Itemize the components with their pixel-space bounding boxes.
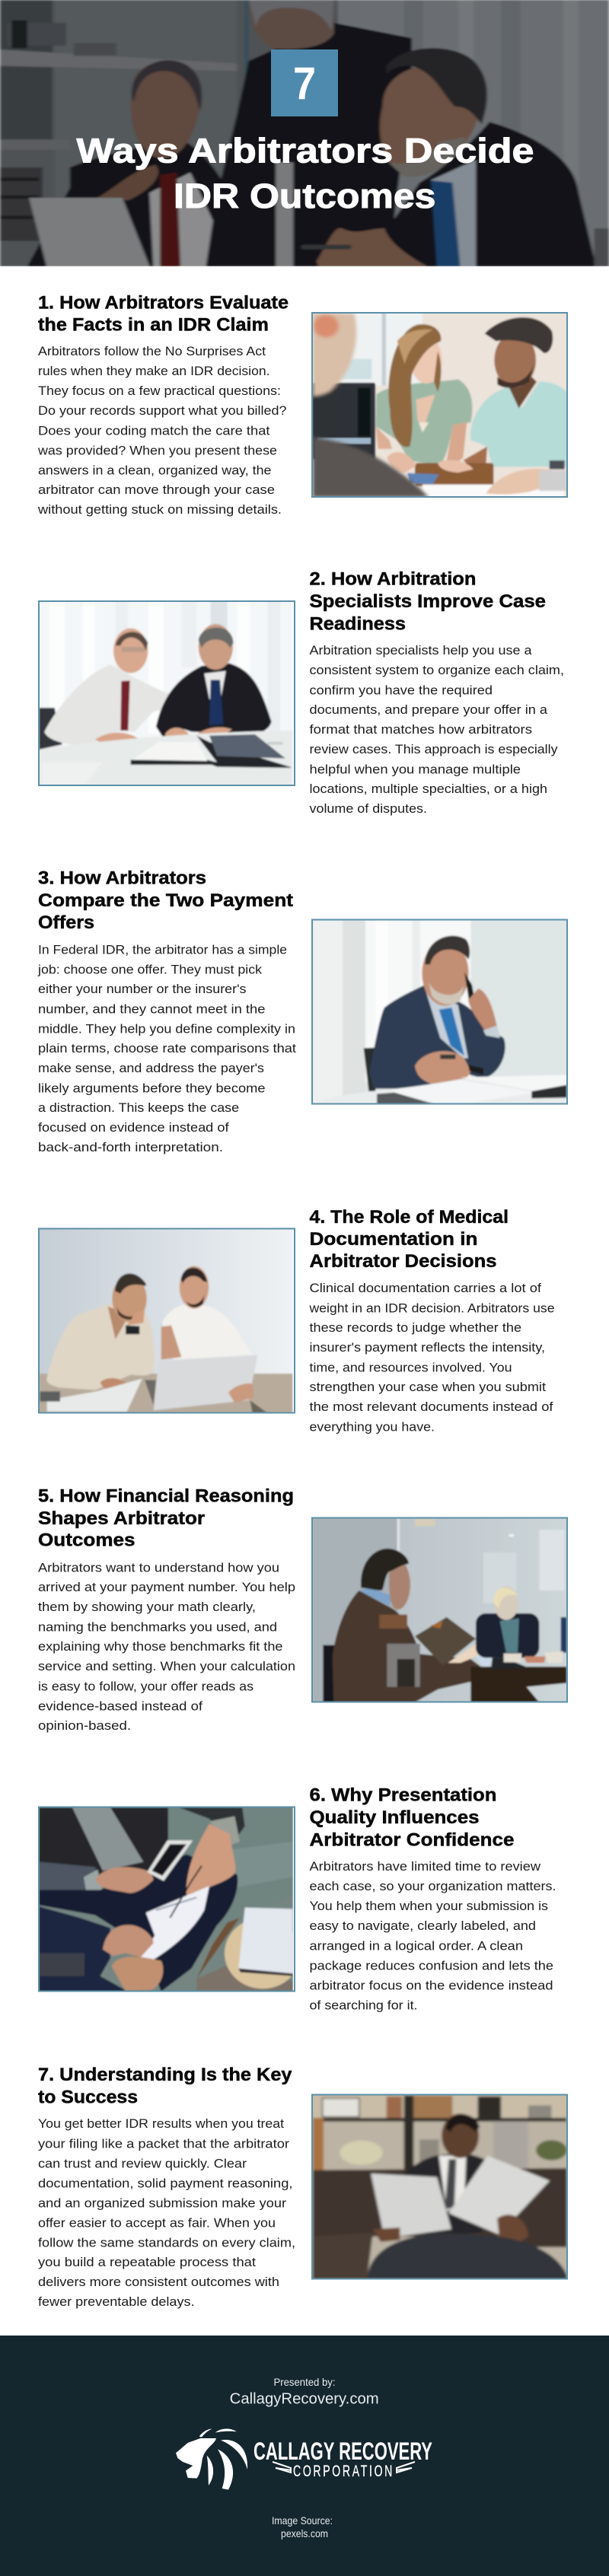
body text 7: delivers more consistent outcomes with (38, 2275, 279, 2289)
heading 6: Arbitrator Confidence (309, 1829, 515, 1851)
body text 6: each case, so your organization matters. (309, 1880, 556, 1893)
image frame 7 (312, 2094, 567, 2278)
body text 1: rules when they make an IDR decision. (38, 365, 269, 378)
heading 2 (309, 569, 546, 635)
image: man reading papers on a sofa (311, 2093, 571, 2283)
body text 7: you build a repeatable process that (38, 2256, 256, 2269)
body text 5: Arbitrators want to understand how you (38, 1562, 279, 1575)
body text 5: evidence-based instead of (38, 1700, 203, 1714)
panel: section 2 (34, 569, 564, 816)
body text 7: You get better IDR results when you treat (38, 2117, 284, 2131)
heading 3: Compare the Two Payment (38, 890, 293, 911)
body text 1: Do your records support what you billed? (38, 404, 286, 418)
body text 5: naming the benchmarks you used, and (38, 1621, 277, 1635)
body text 7: and an organized submission make your (38, 2196, 287, 2210)
panel: section 5 (38, 1485, 571, 1733)
heading 5: Shapes Arbitrator (38, 1508, 205, 1529)
title: IDR Outcomes (174, 177, 435, 215)
body text 1: was provided? When you present these (37, 444, 277, 458)
body text 6: arbitrator focus on the evidence instead (309, 1979, 553, 1992)
body text 5: them by showing your math clearly, (38, 1600, 256, 1614)
body text 2: helpful when you manage multiple (309, 763, 521, 776)
number badge (271, 49, 338, 116)
body text 6 (309, 1860, 556, 2012)
icon: right wing swoosh (397, 2462, 415, 2473)
body text 2: documents, and prepare your offer in a (309, 703, 548, 717)
heading 1: 1. How Arbitrators Evaluate (38, 292, 289, 314)
heading 7: to Success (38, 2087, 138, 2108)
body text 5: opinion-based. (38, 1719, 131, 1733)
presented by text: Presented by: (274, 2376, 335, 2388)
body text 6: arranged in a logical order. A clean (309, 1939, 523, 1953)
logo: Callagy Recovery Corporation: CORPORATION (293, 2463, 394, 2480)
panel: footer (0, 2336, 609, 2576)
heading 3: 3. How Arbitrators (38, 868, 206, 889)
image source credit: Image Source: (272, 2514, 333, 2527)
icon: lion head (176, 2428, 247, 2490)
body text 2: confirm you have the required (309, 683, 493, 697)
body text 3: a distraction. This keeps the case (38, 1101, 239, 1115)
body text 7: documentation, solid payment reasoning, (38, 2176, 292, 2190)
heading 5: 5. How Financial Reasoning (38, 1485, 294, 1507)
body text 4: insurer's payment reflects the intensity, (309, 1341, 545, 1355)
image source credit: pexels.com (281, 2527, 328, 2539)
body text 4: Clinical documentation carries a lot of (309, 1282, 541, 1295)
right man (390, 122, 596, 266)
body text 7: follow the same standards on every claim, (38, 2236, 295, 2250)
body text 3: make sense, and address the payer's (38, 1062, 264, 1075)
image source credit (272, 2514, 333, 2539)
body text 4: time, and resources involved. You (309, 1361, 512, 1374)
image frame 2 (39, 601, 295, 785)
body text 4 (308, 1282, 554, 1434)
body text 3: number, and they cannot meet in the (38, 1003, 265, 1017)
body text 3: job: choose one offer. They must pick (37, 963, 263, 977)
body text 7: fewer preventable delays. (38, 2295, 195, 2309)
panel: section 3 (37, 868, 571, 1154)
heading 6: Quality Influences (309, 1807, 480, 1828)
body text 7: can trust and review quickly. Clear (38, 2157, 247, 2170)
body text 7: offer easier to accept as fair. When you (38, 2216, 276, 2230)
number badge: 7 (293, 58, 316, 109)
heading 3: Offers (38, 912, 94, 933)
body text 2: Arbitration specialists help you use a (309, 644, 532, 658)
body text 6: You help them when your submission is (309, 1899, 548, 1913)
body text 1 (37, 345, 287, 517)
body text 5 (38, 1562, 295, 1733)
image: hands sharing a chart (34, 1804, 301, 1995)
presented by text: CallagyRecovery.com (230, 2391, 379, 2408)
image frame 1 (312, 313, 567, 497)
icon: left wing swoosh (273, 2462, 291, 2473)
heading 6 (309, 1785, 515, 1851)
body text 1: arbitrator can move through your case (38, 483, 275, 497)
heading 1 (38, 292, 289, 335)
title: Ways Arbitrators Decide (76, 131, 534, 170)
body text 1: Does your coding match the care that (38, 425, 270, 438)
body text 2: volume of disputes. (309, 802, 427, 816)
body text 3: either your number or the insurer's (38, 982, 247, 996)
body text 5: service and setting. When your calculation (38, 1660, 295, 1673)
body text 6: Arbitrators have limited time to review (309, 1860, 540, 1874)
logo: Callagy Recovery Corporation: CALLAGY RECOVERY (253, 2437, 432, 2465)
center man (210, 23, 412, 266)
heading 5: Outcomes (38, 1530, 136, 1551)
body text 4: weight in an IDR decision. Arbitrators use (308, 1301, 554, 1315)
heading 7 (38, 2065, 292, 2108)
panel: hero header (0, 0, 609, 266)
heading 4: 4. The Role of Medical (309, 1207, 509, 1228)
body text 2: review cases. This approach is especially (309, 743, 558, 756)
body text 5: is easy to follow, your offer reads as (38, 1680, 253, 1694)
body text 2: format that matches how arbitrators (309, 723, 532, 737)
heading 1: the Facts in an IDR Claim (38, 315, 269, 335)
heading 2: 2. How Arbitration (309, 569, 477, 589)
panel: section 7 (38, 2065, 571, 2309)
body text 5: arrived at your payment number. You help (38, 1581, 295, 1594)
presented by text (230, 2376, 379, 2408)
panel: section 1 (37, 292, 571, 517)
body text 1: They focus on a few practical questions: (38, 384, 281, 398)
image: couple talking with advisor (308, 308, 571, 500)
image: two men at a laptop (34, 1225, 297, 1417)
body text 2: consistent system to organize each claim, (309, 664, 564, 677)
body text 1: without getting stuck on missing details. (37, 503, 282, 517)
body text 3: back-and-forth interpretation. (38, 1141, 223, 1154)
logo: Callagy Recovery Corporation (176, 2428, 432, 2490)
panel: section 4 (34, 1207, 554, 1434)
body text 3: middle. They help you define complexity in (38, 1023, 295, 1036)
image frame 3 (312, 919, 567, 1103)
body text 1: answers in a clean, organized way, the (38, 464, 271, 478)
body text 4: these records to judge whether the (309, 1321, 521, 1335)
body text 7: your filing like a packet that the arbitrator (38, 2137, 290, 2151)
image: hero photo of three businessmen (0, 0, 609, 266)
heading 4: Arbitrator Decisions (309, 1251, 496, 1272)
heading 3 (38, 868, 293, 933)
body text 5: explaining why those benchmarks fit the (38, 1640, 283, 1654)
heading 4: Documentation in (309, 1229, 478, 1250)
image: meeting seen through glass (308, 1514, 571, 1706)
heading 7: 7. Understanding Is the Key (38, 2065, 292, 2085)
body text 2: locations, multiple specialties, or a high (309, 782, 547, 796)
body text 3: plain terms, choose rate comparisons that (38, 1042, 296, 1056)
image: man on phone at desk (308, 916, 571, 1108)
body text 1: Arbitrators follow the No Surprises Act (38, 345, 266, 358)
body text 4: the most relevant documents instead of (309, 1400, 553, 1414)
body text 6: easy to navigate, clearly labeled, and (309, 1919, 536, 1933)
left man (27, 142, 224, 266)
panel: section 6 (34, 1785, 556, 2012)
image frame 4 (39, 1228, 295, 1412)
heading 6: 6. Why Presentation (309, 1785, 496, 1805)
body text 7 (38, 2117, 295, 2309)
heading 2: Readiness (309, 613, 406, 635)
title (76, 131, 534, 215)
body text 6: of searching for it. (309, 1998, 417, 2012)
image frame 5 (312, 1517, 567, 1702)
image: two businessmen signing (34, 597, 297, 789)
body text 4: everything you have. (309, 1420, 435, 1434)
body text 4: strengthen your case when you submit (309, 1380, 546, 1394)
body text 3: likely arguments before they become (38, 1082, 265, 1096)
heading 5 (38, 1485, 294, 1551)
body text 6: package reduces confusion and lets the (309, 1959, 553, 1973)
body text 3 (37, 944, 296, 1154)
body text 2 (309, 644, 564, 816)
body text 3: In Federal IDR, the arbitrator has a simple (38, 944, 287, 957)
body text 3: focused on evidence instead of (38, 1121, 229, 1135)
image frame 6 (39, 1807, 295, 1991)
heading 2: Specialists Improve Case (309, 591, 546, 612)
heading 4 (309, 1207, 509, 1272)
